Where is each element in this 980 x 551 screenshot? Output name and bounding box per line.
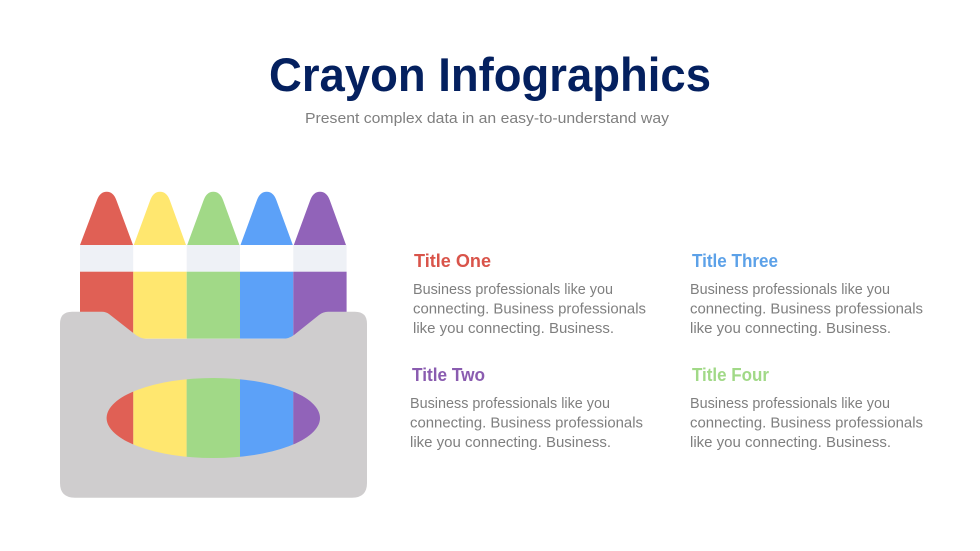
block: title three: Business professionals like you <box>690 281 890 298</box>
block: title one <box>413 251 646 337</box>
block: title two <box>410 365 643 451</box>
block: title one: like you connecting. Business. <box>413 320 614 337</box>
crayon: yellow <box>133 192 187 339</box>
block: title three: Title Three <box>692 251 778 271</box>
block: title four: like you connecting. Business. <box>690 434 891 451</box>
crayon: green <box>187 192 240 339</box>
block: title four: Title Four <box>692 365 769 385</box>
block: title four: Business professionals like you <box>690 395 890 412</box>
crayon: red <box>80 192 133 339</box>
block: title two: Business professionals like you <box>410 395 610 412</box>
crayon: purple <box>293 192 347 339</box>
block: title four: connecting. Business professionals <box>690 414 923 432</box>
title: Crayon Infographics <box>269 48 711 101</box>
box body <box>60 312 367 498</box>
block: title three: connecting. Business professionals <box>690 300 923 318</box>
crayon: blue <box>240 192 293 339</box>
block: title one: Business professionals like you <box>413 281 613 298</box>
block: title two: connecting. Business professionals <box>410 414 643 432</box>
block: title four <box>690 365 923 451</box>
block: title three: like you connecting. Business. <box>690 320 891 337</box>
block: title two: Title Two <box>412 365 485 385</box>
subtitle: Present complex data in an easy-to-understand way <box>305 110 670 127</box>
block: title one: Title One <box>414 251 491 271</box>
illustration: crayon box <box>60 192 367 498</box>
block: title one: connecting. Business professionals <box>413 300 646 318</box>
block: title two: like you connecting. Business. <box>410 434 611 451</box>
box window <box>106 377 321 459</box>
block: title three <box>690 251 923 337</box>
